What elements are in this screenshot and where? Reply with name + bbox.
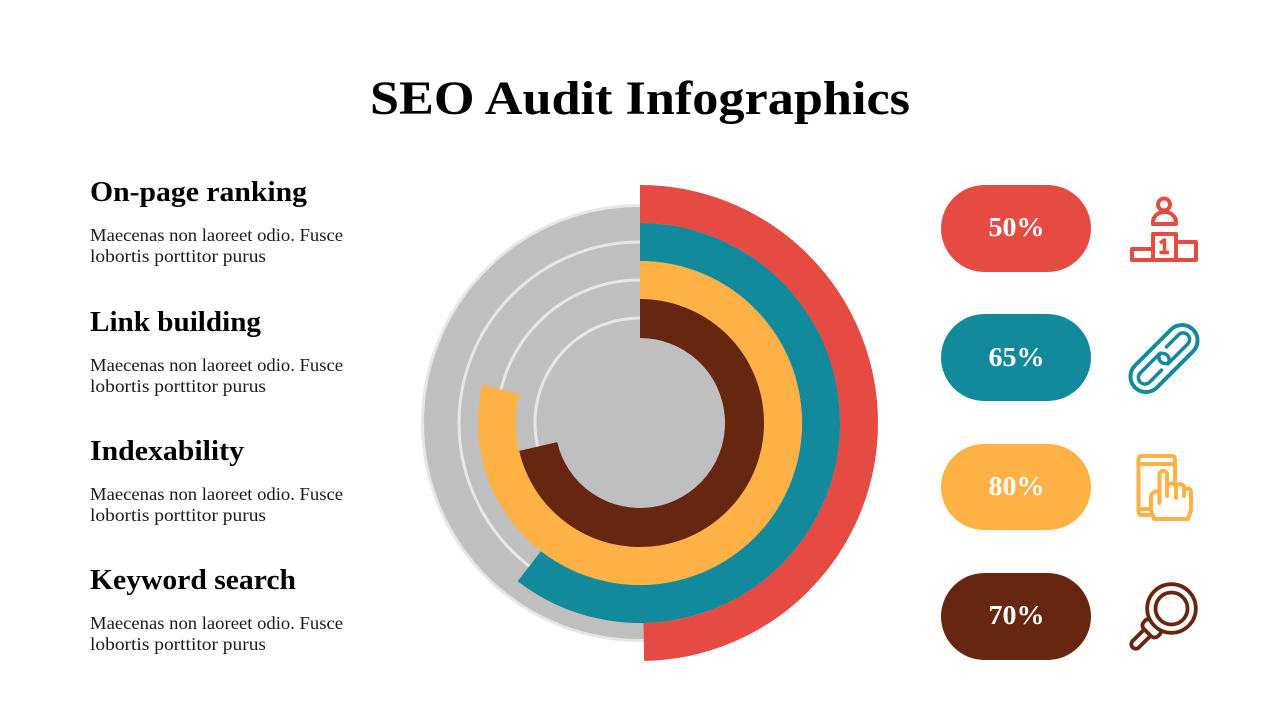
arc: keyword search 70% bbox=[538, 318, 745, 528]
text block: on-page ranking: Maecenas non laoreet odio. Fusce bbox=[90, 225, 343, 245]
icon: podium bbox=[1132, 198, 1196, 260]
text block: on-page ranking bbox=[90, 177, 343, 266]
text block: link building bbox=[90, 307, 343, 396]
pill: 65%: 65% bbox=[988, 342, 1044, 372]
text block: on-page ranking: lobortis porttitor purus bbox=[90, 246, 266, 266]
text block: on-page ranking: On-page ranking bbox=[90, 177, 307, 208]
text block: indexability: Maecenas non laoreet odio. Fusce bbox=[90, 484, 343, 504]
text block: indexability bbox=[90, 436, 343, 525]
text block: keyword search bbox=[90, 565, 343, 654]
text block: keyword search: lobortis porttitor purus bbox=[90, 634, 266, 654]
title: SEO Audit Infographics bbox=[370, 72, 910, 125]
pill: 70% bbox=[941, 573, 1091, 660]
pill: 70%: 70% bbox=[988, 600, 1044, 630]
text block: indexability: lobortis porttitor purus bbox=[90, 505, 266, 525]
pill: 50%: 50% bbox=[988, 212, 1044, 242]
text block: link building: lobortis porttitor purus bbox=[90, 376, 266, 396]
text block: keyword search: Maecenas non laoreet odio. Fusce bbox=[90, 613, 343, 633]
text block: indexability: Indexability bbox=[90, 436, 244, 467]
arc: on-page ranking 50% bbox=[640, 204, 859, 642]
pill: 50% bbox=[941, 185, 1091, 272]
pill: 80% bbox=[941, 444, 1091, 530]
icon: magnifying glass bbox=[1115, 574, 1206, 665]
pill: 80%: 80% bbox=[988, 471, 1044, 501]
radial progress chart bbox=[422, 204, 859, 642]
arc: indexability 80% bbox=[497, 280, 783, 566]
arc: link building 65% bbox=[529, 242, 821, 604]
pill: 65% bbox=[941, 314, 1091, 401]
icon: phone with pointing hand bbox=[1138, 456, 1191, 519]
text block: link building: Link building bbox=[90, 307, 261, 338]
icon: chain link bbox=[1124, 319, 1204, 398]
text block: link building: Maecenas non laoreet odio. Fusce bbox=[90, 355, 343, 375]
text block: keyword search: Keyword search bbox=[90, 565, 296, 596]
chart background disc with rings bbox=[422, 206, 858, 640]
